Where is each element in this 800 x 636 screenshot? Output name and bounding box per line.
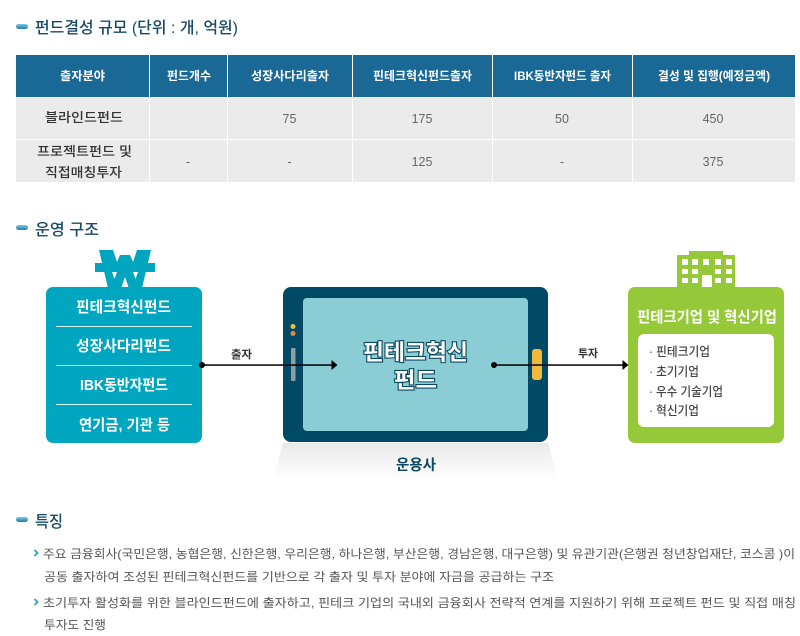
table: fund size: 블라인드펀드	[45, 110, 123, 125]
table: fund size: IBK동반자펀드 출자	[514, 69, 611, 83]
panel: investors: 성장사다리펀드	[76, 338, 171, 355]
table: fund size: 펀드개수	[167, 69, 211, 83]
arrow: contribution	[199, 348, 338, 370]
arrow: investment: 투자	[578, 347, 598, 360]
arrow: investment	[491, 347, 628, 370]
icon: building	[677, 251, 735, 287]
panel: fintech and innovative companies: · 혁신기업	[649, 403, 699, 418]
panel: fintech innovation fund tablet: 핀테크혁신	[363, 340, 468, 365]
icon: won symbol	[95, 250, 155, 288]
panel: tablet shadow	[273, 443, 558, 480]
arrow: contribution: 출자	[231, 348, 252, 361]
text block: feature two	[34, 596, 796, 632]
panel: fintech innovation fund tablet: 펀드	[394, 368, 437, 393]
table: fund size: 출자분야	[60, 69, 105, 83]
heading: fund size: 펀드결성 규모 (단위 : 개, 억원)	[35, 19, 238, 37]
table: fund size	[16, 55, 795, 182]
heading: features: 특징	[35, 513, 63, 531]
heading: features	[16, 513, 63, 531]
table: fund size: 프로젝트펀드 및	[37, 144, 132, 159]
table: fund size: 성장사다리출자	[251, 68, 329, 83]
panel: fintech and innovative companies: · 우수 기술기업	[649, 385, 723, 399]
panel: investors: IBK동반자펀드	[80, 377, 168, 394]
text block: feature one: 공동 출자하여 조성된 핀테크혁신펀드를 기반으로 각 출자 및 투자 분야에 자금을 공급하는 구조	[44, 570, 554, 584]
panel: fintech innovation fund tablet	[283, 287, 548, 442]
table: fund size: 450	[703, 112, 723, 126]
text block: feature two: 투자도 진행	[44, 617, 106, 632]
table: fund size: 125	[412, 155, 432, 169]
panel: fintech and innovative companies: 핀테크기업 및 혁신기업	[637, 309, 777, 326]
panel: investors: 핀테크혁신펀드	[76, 299, 171, 316]
table: fund size: 50	[555, 112, 569, 126]
heading: operating structure: 운영 구조	[35, 221, 99, 239]
text block: feature two: 초기투자 활성화를 위한 블라인드펀드에 출자하고, 핀테크 기업의 국내외 금융회사 전략적 연계를 지원하기 위해 프로젝트 펀드 및 직접 매칭	[43, 596, 796, 610]
panel: fintech and innovative companies	[628, 287, 784, 443]
table: fund size: -	[186, 155, 190, 169]
panel: fintech and innovative companies: · 핀테크기업	[649, 345, 710, 359]
table: fund size: 175	[412, 112, 432, 126]
panel: fintech and innovative companies: · 초기기업	[649, 365, 699, 379]
panel: investors: 연기금, 기관 등	[79, 417, 170, 434]
text block: feature one: 주요 금융회사(국민은행, 농협은행, 신한은행, 우리은행, 하나은행, 부산은행, 경남은행, 대구은행) 및 유관기관(은행권 청년창업재단, 코스콤 )이	[43, 546, 795, 561]
table: fund size: 직접매칭투자	[45, 165, 122, 180]
table: fund size: 핀테크혁신펀드출자	[373, 68, 472, 83]
table: fund size: -	[560, 155, 564, 169]
table: fund size: 375	[703, 155, 723, 169]
table: fund size: 결성 및 집행(예정금액)	[658, 68, 770, 83]
panel: investors	[46, 287, 202, 443]
text block: feature one	[34, 546, 795, 584]
table: fund size: -	[287, 155, 292, 169]
table: fund size: 75	[283, 112, 296, 126]
label: asset manager: 운용사	[396, 457, 437, 474]
